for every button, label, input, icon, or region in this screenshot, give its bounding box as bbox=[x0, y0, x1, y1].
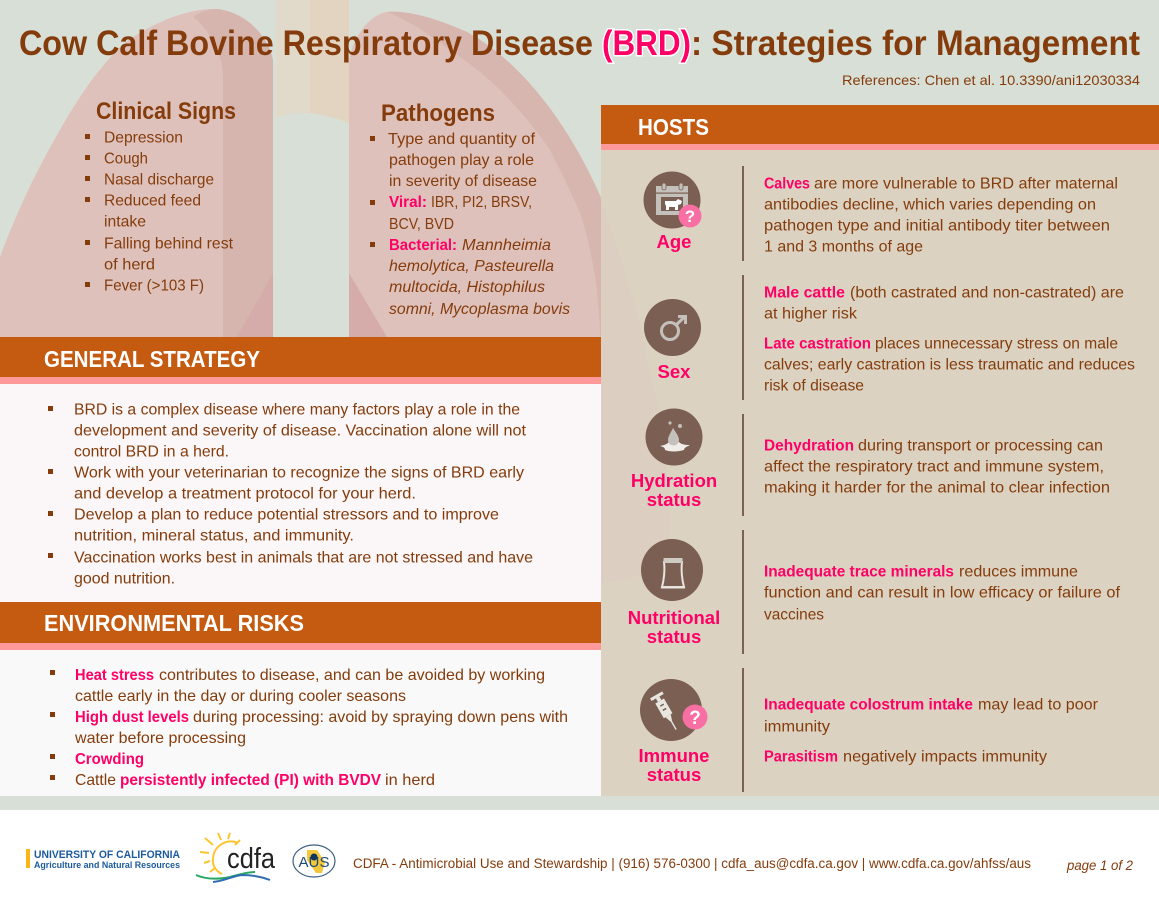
text: age: 1 and 3 months of age bbox=[764, 238, 923, 256]
panel: environmental risks background bbox=[0, 650, 601, 796]
text: sex: at higher risk bbox=[764, 306, 857, 322]
icon: syringe with question mark bbox=[640, 679, 708, 741]
title bbox=[19, 24, 1140, 63]
icon: calendar with cow and question mark bbox=[644, 172, 702, 228]
text block: general strategy: control BRD in a herd. bbox=[74, 444, 229, 460]
text block: environmental risks: in herd bbox=[385, 772, 435, 789]
panel: clinical signs bbox=[85, 98, 236, 294]
text block: general strategy: nutrition, mineral status, and immunity. bbox=[74, 528, 354, 544]
text block: environmental risks bbox=[50, 667, 568, 789]
footer contact line: CDFA - Antimicrobial Use and Stewardship | (916) 576-0300 | cdfa_aus@cdfa.ca.gov | www.cdfa.ca.gov/ahfss/aus bbox=[353, 856, 1031, 871]
text block: general strategy: good nutrition. bbox=[74, 570, 175, 588]
title: Cow Calf Bovine Respiratory Disease bbox=[19, 24, 593, 63]
page number: page 1 of 2 bbox=[1066, 857, 1133, 873]
list: pathogens: Viral: bbox=[389, 194, 427, 211]
text: hydration: making it harder for the animal to clear infection bbox=[764, 480, 1110, 496]
text: age: antibodies decline, which varies depending on bbox=[764, 196, 1096, 214]
logo: University of California: Agriculture and Natural Resources bbox=[34, 860, 180, 871]
panel: hosts background bbox=[601, 150, 1159, 796]
icon: syringe with question mark: ? bbox=[689, 708, 701, 729]
list: pathogens: hemolytica, Pasteurella bbox=[389, 258, 554, 275]
text block: general strategy: Work with your veterinarian to recognize the signs of BRD early bbox=[74, 464, 524, 482]
text: immune: Parasitism bbox=[764, 748, 838, 766]
text block: environmental risks: High dust levels bbox=[75, 709, 189, 726]
text: hydration bbox=[764, 438, 1110, 496]
text: immune: Inadequate colostrum intake bbox=[764, 696, 973, 714]
text: nutritional: Inadequate trace minerals bbox=[764, 564, 954, 580]
divider bbox=[742, 530, 744, 654]
header: environmental risks: ENVIRONMENTAL RISKS bbox=[44, 610, 304, 636]
host row: age bbox=[644, 166, 1118, 261]
panel: pathogens bbox=[370, 100, 570, 318]
text block: environmental risks: contributes to disease, and can be avoided by working bbox=[159, 667, 545, 684]
list: pathogens: Type and quantity of bbox=[388, 131, 536, 148]
footer background bbox=[0, 810, 1159, 899]
text: immune: negatively impacts immunity bbox=[843, 748, 1047, 766]
host row: immune status bbox=[639, 668, 1098, 792]
icon: water drop and puddle bbox=[646, 408, 702, 466]
text block: general strategy: development and severity of disease. Vaccination alone will not bbox=[74, 422, 527, 440]
text: immune: immunity bbox=[764, 718, 830, 736]
list: clinical signs: Falling behind rest bbox=[104, 236, 234, 252]
title: : Strategies for Management bbox=[691, 24, 1140, 63]
text block: environmental risks: water before processing bbox=[74, 730, 246, 747]
label: nutritional status bbox=[628, 607, 720, 647]
icon: calendar with cow and question mark: ? bbox=[685, 207, 695, 226]
list: pathogens: somni, Mycoplasma bovis bbox=[389, 301, 570, 318]
list: pathogens: BCV, BVD bbox=[389, 216, 454, 233]
list: clinical signs bbox=[85, 130, 234, 294]
list: clinical signs: Nasal discharge bbox=[104, 172, 214, 188]
text block: environmental risks: cattle early in the day or during cooler seasons bbox=[75, 688, 406, 705]
text: sex: calves; early castration is less traumatic and reduces bbox=[764, 356, 1135, 374]
label: age: Age bbox=[657, 231, 691, 252]
text block: general strategy bbox=[48, 402, 533, 588]
text block: environmental risks: during processing: avoid by spraying down pens with bbox=[193, 709, 568, 726]
text: hydration: affect the respiratory tract and immune system, bbox=[764, 458, 1104, 476]
logo: cdfa: cdfa bbox=[227, 843, 276, 875]
icon: male symbol bbox=[644, 299, 701, 356]
divider bbox=[742, 414, 744, 516]
text: age: are more vulnerable to BRD after maternal bbox=[814, 176, 1118, 192]
logo: cdfa bbox=[196, 833, 276, 882]
header: hosts bbox=[601, 105, 1159, 150]
text block: general strategy: Vaccination works best in animals that are not stressed and have bbox=[74, 550, 533, 566]
list: pathogens: pathogen play a role bbox=[389, 152, 534, 169]
label: hydration status: status bbox=[647, 489, 701, 510]
label: hydration status bbox=[631, 470, 717, 510]
label: immune status: Immune bbox=[639, 745, 709, 766]
text block: environmental risks: Cattle bbox=[75, 772, 116, 789]
text: sex: Late castration bbox=[764, 336, 871, 352]
text: age: pathogen type and initial antibody titer between bbox=[764, 218, 1110, 234]
divider bbox=[742, 166, 744, 261]
logo: AUS bbox=[293, 845, 335, 877]
host row: nutritional status bbox=[628, 530, 1121, 654]
text: sex: (both castrated and non-castrated) are bbox=[850, 284, 1124, 302]
heading: pathogens: Pathogens bbox=[381, 100, 495, 127]
text: sex bbox=[764, 284, 1135, 394]
logo: AUS: AUS bbox=[298, 854, 330, 871]
header: environmental risks bbox=[0, 602, 601, 650]
list: pathogens: Mannheimia bbox=[462, 237, 551, 254]
text: immune: may lead to poor bbox=[978, 696, 1098, 714]
text block: general strategy: Develop a plan to reduce potential stressors and to improve bbox=[74, 506, 499, 524]
icon: feed bag bbox=[641, 539, 703, 601]
list: clinical signs: of herd bbox=[104, 256, 155, 274]
text: age: Calves bbox=[764, 176, 810, 192]
list: pathogens: multocida, Histophilus bbox=[389, 279, 545, 296]
list: pathogens: in severity of disease bbox=[389, 173, 537, 190]
label: nutritional status: status bbox=[647, 626, 701, 647]
text: hydration: during transport or processing can bbox=[858, 438, 1103, 454]
divider bbox=[742, 275, 744, 400]
list: pathogens: IBR, PI2, BRSV, bbox=[431, 194, 532, 211]
host row: sex bbox=[644, 275, 1135, 400]
list: clinical signs: Cough bbox=[104, 150, 148, 168]
label: immune status: status bbox=[647, 764, 701, 785]
logo: University of California: UNIVERSITY OF CALIFORNIA bbox=[34, 849, 180, 861]
label: nutritional status: Nutritional bbox=[628, 607, 720, 628]
header: general strategy bbox=[0, 337, 601, 384]
divider bbox=[742, 668, 744, 792]
text block: general strategy: and develop a treatment protocol for your herd. bbox=[74, 486, 416, 502]
text: nutritional: reduces immune bbox=[959, 564, 1078, 580]
text block: environmental risks: persistently infected (PI) with BVDV bbox=[120, 772, 381, 789]
text block: general strategy: BRD is a complex disease where many factors play a role in the bbox=[74, 402, 520, 418]
label: sex: Sex bbox=[658, 361, 691, 382]
list: clinical signs: intake bbox=[104, 214, 146, 230]
logo: University of California bbox=[26, 849, 180, 871]
label: immune status bbox=[639, 745, 709, 785]
list: clinical signs: Reduced feed bbox=[104, 192, 201, 210]
panel: general strategy background bbox=[0, 384, 601, 602]
text: sex: Male cattle bbox=[764, 284, 845, 302]
text: nutritional: function and can result in low efficacy or failure of bbox=[764, 584, 1121, 602]
text: sex: places unnecessary stress on male bbox=[875, 336, 1118, 352]
text block: environmental risks: Heat stress bbox=[75, 667, 154, 684]
label: hydration status: Hydration bbox=[631, 470, 717, 491]
list: pathogens: Bacterial: bbox=[389, 237, 457, 254]
text: age bbox=[764, 176, 1118, 256]
title: (BRD) bbox=[602, 24, 691, 63]
header: hosts: HOSTS bbox=[638, 114, 709, 140]
text: sex: risk of disease bbox=[764, 378, 864, 394]
list: pathogens bbox=[370, 131, 570, 318]
text block: environmental risks: Crowding bbox=[75, 751, 144, 768]
text: nutritional: vaccines bbox=[764, 606, 824, 624]
text: immune bbox=[764, 696, 1098, 766]
heading: clinical signs: Clinical Signs bbox=[96, 98, 236, 125]
text: nutritional bbox=[764, 564, 1121, 624]
list: clinical signs: Depression bbox=[104, 130, 183, 146]
references: References: Chen et al. 10.3390/ani12030334 bbox=[842, 72, 1140, 88]
header: general strategy: GENERAL STRATEGY bbox=[44, 346, 260, 372]
illustration: lungs and trachea bbox=[0, 0, 602, 337]
text: hydration: Dehydration bbox=[764, 438, 854, 454]
list: clinical signs: Fever (>103 F) bbox=[104, 278, 204, 294]
host row: hydration status bbox=[631, 408, 1110, 516]
